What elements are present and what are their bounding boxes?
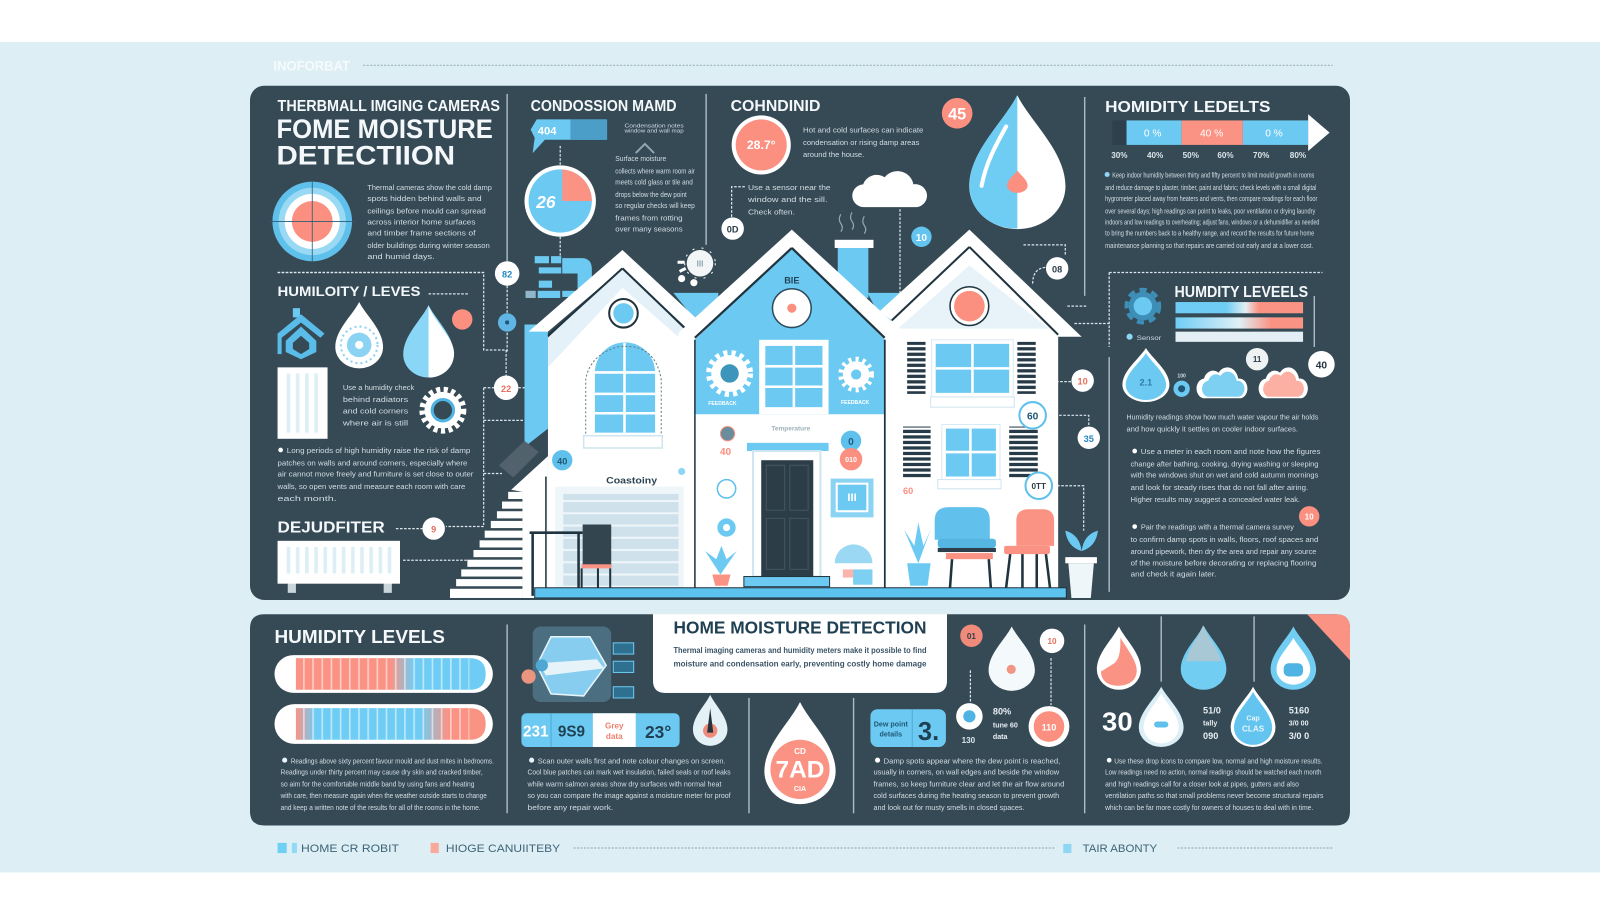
icon: big salmon drop <box>764 702 836 804</box>
text block: left humidity: Long periods of high humidity raise the risk of damp <box>287 446 470 455</box>
sub-panel: left humidity levels <box>277 272 484 593</box>
icon: bricks and pipe <box>526 256 592 298</box>
badge: 45: 45 <box>948 105 966 123</box>
icon: sensor dot: 100 <box>1177 374 1186 380</box>
text block: dew point: Damp spots appear where the dew point is reached, <box>884 756 1060 765</box>
text block: radiator: and cold corners <box>343 406 408 415</box>
sub-panel: right humidity levels <box>1109 272 1335 592</box>
text block: radiator: Use a humidity check <box>343 383 414 392</box>
section: condition title: COHNDINID <box>731 98 820 115</box>
downspout <box>499 324 548 478</box>
icon: sensor dot <box>1173 374 1190 397</box>
text block: condensation: Surface moisture <box>615 154 666 163</box>
framed monitor: III <box>847 492 857 504</box>
text block: condensation: meets cold glass or tile and <box>615 178 693 187</box>
text block: left humidity: air cannot move freely and furniture is set close to outer <box>278 470 474 479</box>
salmon chair <box>1004 509 1054 588</box>
sensor column right <box>840 431 862 470</box>
text block: drops: ventilation paths so that small problems never become structural repairs <box>1105 791 1324 800</box>
humidity bars <box>1176 302 1303 342</box>
section: humidity levels top right: 60% <box>1217 151 1234 160</box>
icon: blue stat drop: Cap <box>1246 714 1260 722</box>
icon: blue tag: 404 <box>538 126 557 138</box>
stat box: Dew point <box>874 721 908 729</box>
text block: thermal imaging: and timber frame sections of <box>367 229 476 238</box>
text block: dew point: usually in corners, on wall edges and beside the window <box>873 768 1060 777</box>
footer legend: HIOGE CANUIITEBY <box>446 843 561 855</box>
icon: blue drop: 2.1 <box>1140 378 1152 388</box>
sensor column left <box>678 427 736 537</box>
icon: sensor circle: 130 <box>962 736 976 745</box>
stat box: 3. <box>918 718 939 746</box>
badge 35 <box>1078 427 1100 449</box>
upper window <box>907 340 1036 407</box>
text block: right humidity: Pair the readings with a thermal camera survey <box>1141 523 1294 532</box>
text block: radiator: behind radiators <box>343 395 408 404</box>
icon: salmon gauge <box>732 115 791 174</box>
footer legend: TAIR ABONTY <box>1083 843 1158 855</box>
text block: left humidity <box>277 446 474 503</box>
text block: thermal imaging: older buildings during winter season <box>367 241 490 250</box>
text block: left humidity: each month. <box>278 494 337 503</box>
text block: right humidity: and how quickly it settles on cooler indoor surfaces. <box>1127 425 1298 434</box>
small note: window and wall map <box>624 129 684 135</box>
section: humidity levels top right: 80% <box>1290 151 1307 160</box>
right house body <box>880 230 1082 588</box>
text block: condensation: collects where warm room air <box>615 166 695 175</box>
stat text: 5160 <box>1289 705 1309 715</box>
stat bar <box>521 713 680 747</box>
icon: big salmon drop: 7AD <box>776 757 824 784</box>
text block: right humidity: change after bathing, cooking, drying washing or sleeping <box>1131 459 1318 468</box>
text block: right humidity: Use a meter in each room and note how the figures <box>1141 447 1321 456</box>
badge: 45 <box>942 98 972 129</box>
heading: dehumidifier: DEJUDFITER <box>278 520 385 537</box>
text block: thermal imaging: spots hidden behind walls and <box>367 194 482 203</box>
stat text: 80% <box>993 706 1011 716</box>
badge 9: 9 <box>431 525 436 535</box>
text block: right humidity: and check it again later. <box>1131 570 1216 579</box>
badge blue 40 <box>552 450 572 470</box>
framed monitor <box>831 479 873 517</box>
chart: pie <box>524 165 596 237</box>
stat text: 51/0 <box>1203 705 1221 715</box>
badge small white: 11 <box>1253 355 1262 364</box>
header label: INOFORBAT <box>273 58 350 74</box>
blue fill behind roofs <box>673 293 908 327</box>
icon: blue stat drop: CLAS <box>1242 725 1265 734</box>
round window <box>609 299 638 328</box>
bar: humidity pill 2 <box>274 704 493 744</box>
text block: dew point: cold surfaces during the heating season to prevent growth <box>873 791 1059 800</box>
sign above door: Temperature <box>771 426 811 433</box>
icon: salmon gauge <box>1029 706 1069 747</box>
stat text <box>1289 705 1309 741</box>
divider lines and connectors <box>278 94 1109 560</box>
icon: blue stat drop <box>1231 687 1275 747</box>
text block: humidity levels top right: Keep indoor humidity between thirty and fifty percent to limit mould growth in rooms <box>1112 171 1314 180</box>
text block: humidity levels top right <box>1105 171 1319 250</box>
white title box: moisture and condensation early, preventing costly home damage <box>673 658 927 668</box>
left house body <box>511 250 705 598</box>
section: thermal imaging title: FOME MOISTURE <box>277 114 493 144</box>
badge: blue circle: 10 <box>916 233 927 244</box>
icon: blue water drop <box>1181 626 1226 690</box>
icon: blue drop <box>1122 348 1169 402</box>
stat text: 3/0 00 <box>1289 720 1309 728</box>
text block: humidity levels top right: indoors and low readings to overheating; adjust fans, windows or a dehumidifier as needed <box>1105 217 1319 226</box>
small note <box>624 124 684 135</box>
icon: thermal target <box>269 182 355 261</box>
stat text: data <box>993 733 1009 741</box>
section: thermal imaging title: THERBMALL IMGING CAMERAS <box>278 98 500 115</box>
icon: small drop <box>693 695 727 746</box>
stat bar: data <box>606 732 623 741</box>
text block: left humidity: patches on walls and around corners, especially where <box>278 458 467 467</box>
small note: Condensation notes <box>624 124 684 130</box>
sensor column left: 40 <box>720 447 732 458</box>
text block: right humidity: Humidity readings show how much water vapour the air holds <box>1127 412 1318 421</box>
badge salmon 01: 01 <box>967 632 976 641</box>
small legend: Sensor <box>1137 335 1161 342</box>
badge 60 <box>1019 402 1046 429</box>
text block: scan <box>527 756 731 812</box>
chart: pie: 26 <box>535 192 556 212</box>
badge 0TT: 0TT <box>1032 482 1046 491</box>
text block: right humidity: and look for steady rises that do not fall after airing. <box>1131 483 1308 492</box>
badge 82 <box>495 261 519 286</box>
text block: scan: Cool blue patches can mark wet insulation, failed seals or roof leaks <box>528 768 731 777</box>
footer legend <box>278 843 1333 855</box>
icon: blue tag <box>531 119 607 153</box>
stat box <box>870 709 946 747</box>
section: bottom humidity levels <box>274 626 494 812</box>
text block: thermal imaging: and humid days. <box>367 252 435 261</box>
illustration: house <box>450 230 1098 598</box>
text block: dew point: frames, so keep furniture clear and let the air flow around <box>873 780 1064 789</box>
text block: drops: Use these drop icons to compare low, normal and high moisture results. <box>1114 756 1322 765</box>
badge salmon: 10 <box>1305 512 1314 521</box>
garage door <box>555 487 684 588</box>
icon: dotted drop <box>335 302 383 368</box>
stat box: details <box>880 731 902 739</box>
text block: right humidity <box>1127 412 1321 579</box>
white title box: Thermal imaging cameras and humidity meters make it possible to find <box>673 645 927 655</box>
stat bar: 231 <box>523 724 549 741</box>
text block: condition: Hot and cold surfaces can indicate <box>803 126 923 135</box>
ground strip <box>535 588 1066 598</box>
icon: sensor circle <box>956 703 983 745</box>
icon: wall radiator <box>278 367 328 439</box>
callout badges <box>422 217 1100 540</box>
icon: big salmon drop: CIA <box>794 785 806 793</box>
text block: humidity levels top right: hygrometer placed away from heaters and vents, then compare readings for each floor <box>1105 194 1318 203</box>
badge 40 <box>1308 351 1335 378</box>
white title box <box>653 614 947 693</box>
section: thermal imaging title: DETECTIION <box>277 140 455 170</box>
text block: scan: before any repair work. <box>528 803 613 812</box>
text block: dew point <box>873 756 1064 812</box>
stat text: 090 <box>1203 731 1218 741</box>
section: humidity levels top right: 0 % <box>1144 129 1161 140</box>
footer legend: HOME CR ROBIT <box>301 843 399 855</box>
badge small blue <box>498 313 516 332</box>
bar: humidity pill 1 <box>274 655 493 693</box>
wall gauge <box>772 289 811 328</box>
icon: blue cloud <box>1197 367 1247 398</box>
heading: HUMDITY LEVEELS <box>1174 284 1308 301</box>
stat: 30: 30 <box>1102 709 1133 737</box>
stairs <box>450 492 522 598</box>
section: humidity levels top right <box>1105 99 1330 160</box>
text block: condition: Use a sensor near the <box>748 183 831 192</box>
badge 35: 35 <box>1084 434 1094 444</box>
section: humidity levels top right: 50% <box>1183 151 1200 160</box>
stat bar: Grey <box>605 722 624 731</box>
text block: and keep a written note of the results for all of the rooms in the home. <box>281 803 481 812</box>
text block: right humidity: Higher results may suggest a concealed water leak. <box>1131 495 1300 504</box>
badge white 10: 10 <box>1048 637 1057 646</box>
door <box>744 443 830 587</box>
plant left of chair <box>904 522 931 586</box>
text block: Readings above sixty percent favour mould and dust mites in bedrooms. <box>291 756 494 765</box>
text block: condition: condensation or rising damp areas <box>803 138 920 147</box>
icon: sun with droplets <box>678 248 715 286</box>
gable gauge <box>950 287 989 326</box>
text block: thermal imaging: Thermal cameras show the cold damp <box>367 183 492 192</box>
text block: condensation <box>615 154 695 234</box>
text block: left humidity: walls, so open vents and measure each room with care <box>277 482 465 491</box>
badge 08 <box>1046 257 1068 280</box>
badge 0TT <box>1026 472 1052 499</box>
text block: scan: Scan outer walls first and note colour changes on screen. <box>538 756 726 765</box>
badge 22 <box>494 376 518 400</box>
icon: salmon gauge: 28.7° <box>747 138 776 152</box>
section: humidity levels top right: 70% <box>1253 151 1270 160</box>
text block: radiator: where air is still <box>342 419 408 428</box>
icon: large water drop <box>969 95 1065 229</box>
text block: condition: around the house. <box>803 150 864 159</box>
sensor column right: 010 <box>845 456 857 464</box>
text block: right humidity: around pipework, then dry the area and repair any source <box>1131 547 1316 556</box>
text block: condensation: frames from rotting <box>615 213 683 222</box>
icon: cloud with steam <box>839 171 927 234</box>
gear left: FEEDBACK <box>708 401 737 407</box>
icon: salmon cloud <box>1259 367 1308 398</box>
icon: blue drop <box>403 305 454 378</box>
panel: bottom dark panel <box>250 614 1350 826</box>
icon: blue gear <box>1127 290 1159 322</box>
stat text <box>1203 705 1221 741</box>
sub-panel: left humidity levels: HUMILOITY / LEVES <box>278 284 420 300</box>
icon: white blue drop <box>1271 627 1316 690</box>
text block: condition: window and the sill. <box>747 195 828 204</box>
text block: condensation: over many seasons <box>615 225 683 234</box>
text block: dew point: and look out for musty smells in closed spaces. <box>873 803 1024 812</box>
gear right <box>841 359 871 406</box>
icon: chevron <box>636 144 654 153</box>
badge 0D <box>721 217 744 240</box>
icon: sun with droplets: III <box>697 259 703 268</box>
text block: drops: and high readings call for a closer look at pipes, gutters and also <box>1105 780 1299 789</box>
text block: right humidity: with the windows shut on wet and cold autumn mornings <box>1130 471 1318 480</box>
text block: right humidity: to confirm damp spots in walls, floors, roof spaces and <box>1131 535 1318 544</box>
section: humidity levels top right: HOMIDITY LEDELTS <box>1105 99 1270 116</box>
text block: Readings under thirty percent may cause dry skin and cracked timber, <box>281 768 483 777</box>
text block: radiator <box>342 383 414 428</box>
text block: thermal imaging: ceilings before mould can spread <box>367 206 486 215</box>
planters <box>843 569 872 585</box>
text block: condensation: so regular checks will keep <box>615 201 695 210</box>
sensor column right: 0 <box>848 437 854 448</box>
badge: blue circle <box>911 227 932 247</box>
badge 60: 60 <box>1027 411 1039 422</box>
stat text: tune 60 <box>993 722 1018 730</box>
small legend <box>1127 334 1161 342</box>
panel: main dark panel <box>250 86 1350 600</box>
stat bar: 9S9 <box>558 724 585 741</box>
stat text: 3/0 0 <box>1289 731 1309 741</box>
text block: drops: Low readings need no action, normal readings should be watched each month <box>1105 768 1321 777</box>
text block: condition: Check often. <box>748 207 795 216</box>
badge salmon <box>1299 506 1319 527</box>
text block: humidity levels top right: to bring the numbers back to a healthy range, and record the results for future home <box>1105 229 1314 238</box>
badge: salmon <box>452 309 472 330</box>
label: house area: Coastoiny <box>606 476 658 486</box>
chimney <box>835 240 873 298</box>
text block: thermal imaging <box>367 183 492 261</box>
icon: dehumidifier radiator <box>278 541 400 593</box>
text block: drops: which can be far more costly for owners of houses to deal with in time. <box>1104 803 1313 812</box>
section: humidity levels top right: 0 % <box>1265 129 1283 140</box>
gear left <box>708 353 750 407</box>
icon: salmon drop <box>1097 627 1141 690</box>
text block: thermal imaging: across interior home surfaces <box>367 217 476 226</box>
upper window <box>759 340 829 414</box>
badge 9 <box>422 517 445 540</box>
section: humidity levels top right: 30% <box>1111 151 1128 160</box>
text block: drops <box>1104 756 1324 812</box>
potted plant right <box>1065 531 1098 598</box>
label above gauge: BIE <box>784 276 799 286</box>
section: thermal imaging title <box>277 98 500 170</box>
text block: with care, then measure again when the weather outside starts to change <box>280 791 487 800</box>
text block: humidity levels top right: over several days; high readings can point to leaks, poor ventilation or drying laundry <box>1105 206 1315 215</box>
middle house body <box>678 230 904 588</box>
icon: house <box>278 308 324 359</box>
stat text <box>993 706 1018 741</box>
badge 22: 22 <box>501 384 511 394</box>
badge white 10 <box>1040 629 1064 653</box>
label 60 salmon: 60 <box>903 486 913 496</box>
badge 82: 82 <box>502 270 512 280</box>
divider lines bottom <box>507 616 1254 813</box>
white title box: HOME MOISTURE DETECTION <box>673 618 927 638</box>
section: humidity levels top right: 40 % <box>1200 129 1223 140</box>
icon: thermal scan diagram <box>521 627 634 702</box>
text block: scan: so you can compare the image against a moisture meter for proof <box>528 791 731 800</box>
icon: white drop with dot <box>989 627 1035 691</box>
table and chair <box>530 524 611 598</box>
left plant <box>705 546 737 586</box>
badge 0D: 0D <box>727 225 739 235</box>
section: humidity levels top right: 40% <box>1147 151 1164 160</box>
text block: condensation: drops below the dew point <box>615 190 687 199</box>
icon: salmon gauge: 110 <box>1042 723 1056 733</box>
text block: condition <box>747 126 923 216</box>
section: bottom humidity levels: HUMIDITY LEVELS <box>274 626 445 647</box>
badge small white <box>1246 348 1268 370</box>
text block: scan: while warm salmon areas show dry surfaces with normal heat <box>527 780 722 789</box>
badge salmon 01 <box>960 624 983 647</box>
text block: so aim for the comfortable middle band by using fans and heating <box>281 780 474 789</box>
text block: humidity levels top right: and reduce damage to plaster, timber, paint and fabric; check levels with a small digital <box>1105 183 1317 192</box>
text block: humidity levels top right: maintenance planning so that repairs are carried out early and at a lower cost. <box>1105 241 1313 250</box>
badge 10: 10 <box>1078 377 1088 387</box>
section: condensation title: CONDOSSION MAMD <box>531 98 677 115</box>
stat bar: 23° <box>645 722 671 742</box>
text block <box>280 756 494 812</box>
badge 10 <box>1071 369 1094 392</box>
text block: right humidity: of the moisture before decorating or replacing flooring <box>1131 558 1316 567</box>
gear right: FEEDBACK <box>841 400 870 406</box>
icon: sun gear <box>422 390 463 431</box>
badge 08: 08 <box>1052 264 1062 274</box>
badge 40: 40 <box>1316 360 1327 371</box>
lower window <box>903 424 1038 489</box>
salmon corner <box>1307 614 1350 660</box>
umbrella chart <box>835 544 872 563</box>
badge blue 40: 40 <box>557 456 567 466</box>
stat text: tally <box>1203 720 1217 728</box>
icon: big salmon drop: CD <box>794 747 806 756</box>
arched window <box>584 342 662 448</box>
icon: white drop <box>1139 687 1184 747</box>
blue armchair <box>935 507 996 588</box>
